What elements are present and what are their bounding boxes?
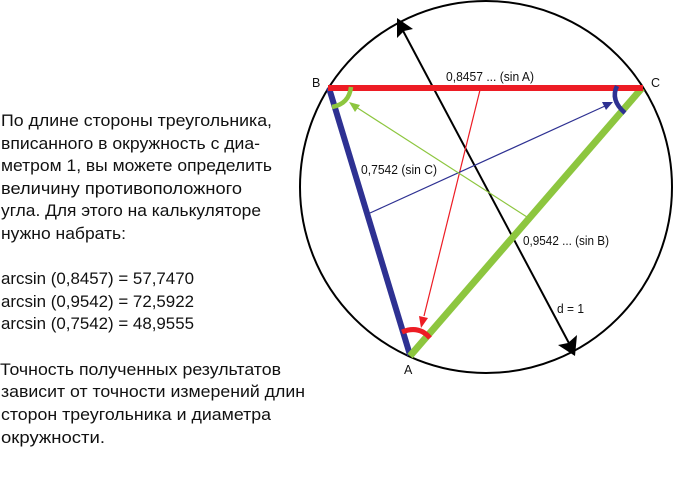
label: A: A	[404, 363, 413, 377]
side BC red	[328, 85, 643, 91]
text block: arcsin calculations: arcsin (0,9542) = 72,5922	[1, 292, 194, 311]
arrow: green, side b to angle B	[349, 102, 527, 217]
label: sin C: 0,7542 (sin C)	[361, 163, 437, 177]
text block: accuracy note: зависит от точности измерений длин	[1, 382, 305, 401]
text block: explanation: нужно набрать:	[1, 224, 126, 243]
side AB blue	[329, 88, 410, 355]
text block: accuracy note	[0, 360, 305, 447]
arrow: diameter d = 1	[397, 18, 577, 356]
angle arc C	[615, 86, 625, 113]
text block: explanation	[1, 111, 272, 243]
arrow: red, side a to angle A	[419, 90, 480, 328]
label: diameter: d = 1	[557, 302, 584, 316]
angle arc B	[332, 87, 351, 107]
label: B: B	[312, 76, 320, 90]
text block: explanation: По длине стороны треугольника,	[1, 111, 272, 130]
text block: explanation: вписанного в окружность с диа-	[1, 134, 260, 153]
text block: explanation: угла. Для этого на калькуляторе	[1, 201, 261, 220]
label: C: C	[651, 76, 660, 90]
diagram: inscribed triangle	[300, 1, 672, 377]
text block: accuracy note: окружности.	[1, 428, 105, 447]
text block: arcsin calculations	[1, 269, 194, 333]
text block: arcsin calculations: arcsin (0,8457) = 57,7470	[1, 269, 194, 288]
text block: explanation: метром 1, вы можете определить	[1, 156, 272, 175]
text block: accuracy note: Точность полученных результатов	[0, 360, 281, 379]
text block: accuracy note: сторон треугольника и диаметра	[1, 405, 272, 424]
side AC green	[410, 88, 642, 356]
label: sin B: 0,9542 ... (sin B)	[523, 234, 609, 248]
text block: explanation: величину противоположного	[1, 179, 242, 198]
arrow: blue, side c to angle C	[370, 102, 613, 213]
circle	[300, 1, 672, 373]
angle arc A	[402, 330, 430, 338]
text block: arcsin calculations: arcsin (0,7542) = 48,9555	[1, 314, 194, 333]
label: sin A: 0,8457 ... (sin A)	[446, 70, 534, 84]
